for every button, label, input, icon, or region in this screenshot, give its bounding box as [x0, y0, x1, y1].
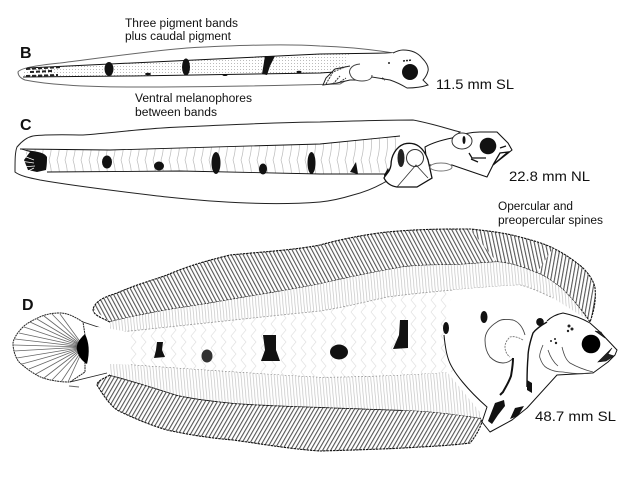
fish D pigment spots: [154, 311, 544, 362]
fish C pectoral fin disc: [384, 143, 432, 187]
label: Ventral melanophores note: Ventral melanophores: [135, 93, 252, 105]
fish C finfold: [15, 120, 460, 204]
fish B pectoral fin: [350, 64, 372, 81]
fish D belly pigment: [488, 380, 532, 424]
fish B gut and head: [323, 50, 428, 88]
fish D caudal peduncle: [85, 327, 130, 367]
fish D snout and jaws: [595, 331, 614, 362]
fish B finfold: [18, 45, 393, 87]
fish C body with myomeres: [20, 136, 396, 174]
fish B eye: [402, 64, 418, 80]
fish C caudal rays: [20, 155, 35, 172]
fish D anterior dorsal rays: [470, 229, 553, 273]
fish D eye: [582, 335, 600, 353]
fish C nape ellipse: [452, 133, 472, 149]
label: size 11.5 mm SL: 11.5 mm SL: [436, 76, 514, 92]
fish D dorsal fin: [93, 229, 497, 322]
label: plus caudal pigment note: plus caudal pigment: [125, 31, 232, 43]
label: size 22.8 mm NL: 22.8 mm NL: [509, 168, 590, 184]
fish C caudal pigment: [20, 149, 47, 172]
fish D head speckles: [550, 324, 574, 344]
fish D dorsal fin tip rays: [537, 248, 595, 322]
label: panel letter B: B: [20, 45, 32, 62]
fish D anal zone dotted line: [110, 363, 447, 377]
fish D trunk upper line: [110, 285, 553, 333]
fish C gut ellipse: [430, 163, 452, 171]
label: size 48.7 mm SL: 48.7 mm SL: [535, 408, 616, 424]
fish D caudal peduncle pigment: [77, 334, 89, 364]
fish D preopercle lines: [540, 345, 593, 374]
fish B head speckle: [382, 60, 412, 80]
label: panel letter D: D: [22, 297, 34, 314]
fish D anal pterygiophore zone: [110, 363, 480, 418]
fish D opercular line: [527, 322, 547, 387]
label: preopercular spines note: preopercular spines: [498, 215, 603, 227]
fish D scale bar: [69, 386, 79, 387]
fish D caudal fin: [13, 313, 110, 382]
fish D anal fin: [97, 375, 482, 451]
label: Opercular and note: Opercular and: [498, 201, 573, 213]
fish D head outline: [444, 313, 617, 432]
fish C: 22.8 mm larva: [15, 120, 512, 204]
fish D head and abdomen: [444, 285, 617, 432]
fish D trunk myomeres: [110, 290, 453, 377]
fish C eye: [480, 138, 496, 154]
fish C pigment spots: [102, 152, 392, 180]
fish D: 48.7 mm juvenile: [13, 229, 617, 451]
fish D dorsal fin outline: [93, 229, 595, 322]
label: Three pigment bands note: Three pigment bands: [125, 18, 238, 30]
label: panel letter C: C: [20, 117, 32, 134]
fish B tail pigment: [26, 67, 62, 76]
fish D anal fin base line: [110, 375, 403, 410]
fish C head: [425, 132, 512, 177]
fish B pigment bands: [104, 56, 302, 76]
fish D pectoral fin: [485, 319, 525, 395]
fish C jaws: [469, 146, 508, 165]
fish B body: [23, 53, 350, 77]
fish B: 11.5 mm larva: [18, 45, 428, 88]
label: between bands note: between bands: [135, 107, 217, 119]
fish D dorsal pterygiophore zone: [110, 262, 588, 333]
fish B gut speckle: [326, 67, 346, 84]
